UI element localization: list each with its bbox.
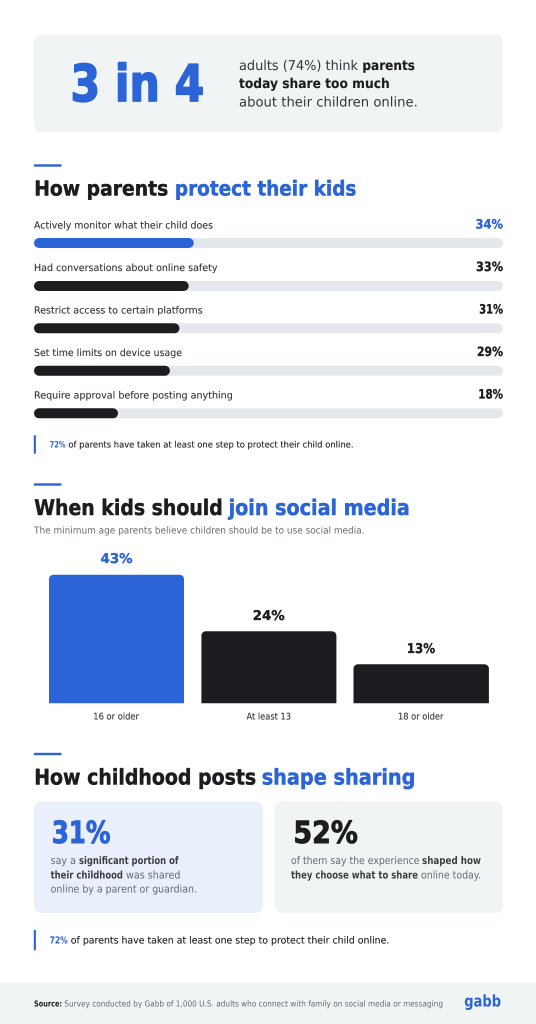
heading: shape sharing: How childhood posts xyxy=(34,765,256,790)
bar row: require approval 18%: Require approval before posting anything xyxy=(34,390,233,401)
section: how childhood posts shape sharing xyxy=(34,753,503,950)
column: 16 or older 43%: 16 or older xyxy=(93,711,139,722)
card: 31%: their childhood xyxy=(51,869,123,881)
card: 31%: 31% xyxy=(52,816,111,851)
column: 16 or older 43% xyxy=(49,552,184,722)
logo: gabb: gabb xyxy=(464,992,501,1011)
column: at least 13 24%: 24% xyxy=(253,609,285,624)
section: when kids should join social media xyxy=(33,483,489,722)
card: 52%: online today. xyxy=(421,869,481,881)
heading: protect: protect their kids xyxy=(175,177,356,201)
source text: Survey conducted by Gabb of 1,000 U.S. adults who connect with family on social media or messaging xyxy=(64,999,443,1009)
bar row: time limits 29%: 29% xyxy=(477,345,503,360)
bar row: require approval 18%: 18% xyxy=(478,387,503,402)
card: 31%: online by a parent or guardian. xyxy=(51,884,197,896)
card: 31%: say a xyxy=(51,855,76,867)
heading: shape sharing xyxy=(34,765,415,790)
bar row: actively monitor 34% xyxy=(34,218,503,248)
callout: 72% of parents repeated: 72% xyxy=(50,935,68,946)
column: at least 13 24% xyxy=(201,609,336,722)
bar row: conversations 33%: Had conversations about online safety xyxy=(34,263,218,274)
card: 52%: they choose what to share xyxy=(291,869,418,881)
card: 52% xyxy=(274,801,503,913)
heading: join social media xyxy=(34,496,410,521)
card: 52%: of them say the experience xyxy=(291,855,420,867)
section: how parents protect their kids xyxy=(34,164,503,454)
callout: 72% of parents repeated: of parents have taken at least one step to protect their child online. xyxy=(71,935,389,946)
card: 31%: was shared xyxy=(126,869,180,881)
heading: join social media: When kids should xyxy=(34,496,223,521)
source text: Source: xyxy=(34,999,62,1009)
heading: join social media: join social media xyxy=(228,496,410,521)
card: 52%: shaped how xyxy=(422,855,481,867)
bar row: actively monitor 34%: 34% xyxy=(476,218,503,233)
bar row: restrict access 31%: 31% xyxy=(479,303,503,318)
callout: 72% of parents: 72% xyxy=(50,440,66,450)
bar row: restrict access 31%: Restrict access to certain platforms xyxy=(34,306,203,317)
card: 52%: 52% xyxy=(293,816,358,851)
hero text: about their children online. xyxy=(239,95,418,111)
column: 18 or older 13% xyxy=(354,642,489,722)
callout: 72% of parents xyxy=(34,435,354,454)
bar row: conversations 33%: 33% xyxy=(476,260,503,275)
bar row: time limits 29% xyxy=(34,345,503,376)
card: 31% xyxy=(34,801,263,913)
column: 16 or older 43%: 43% xyxy=(100,552,133,567)
hero text: parents xyxy=(362,58,415,74)
bar row: restrict access 31% xyxy=(34,303,503,333)
column: at least 13 24%: At least 13 xyxy=(246,711,291,722)
callout: 72% of parents: of parents have taken at least one step to protect their child online. xyxy=(68,440,354,450)
bar row: conversations 33% xyxy=(34,260,503,291)
hero text: adults (74%) think xyxy=(239,58,358,74)
heading: protect xyxy=(34,177,356,201)
bar row: require approval 18% xyxy=(34,387,503,418)
heading: protect: How parents xyxy=(34,177,168,201)
hero number: 3 in 4: 3 in 4 xyxy=(70,54,204,113)
subtitle: The minimum age parents believe children should be to use social media. xyxy=(33,525,364,536)
footer band xyxy=(0,983,536,1024)
heading: shape sharing: shape sharing xyxy=(262,765,416,790)
callout: 72% of parents repeated xyxy=(34,930,389,950)
card: 31%: significant portion of xyxy=(79,855,179,867)
column: 18 or older 13%: 18 or older xyxy=(398,711,444,722)
bar row: actively monitor 34%: Actively monitor what their child does xyxy=(34,221,213,232)
hero text xyxy=(239,58,418,111)
bar row: time limits 29%: Set time limits on device usage xyxy=(34,348,182,359)
column: 18 or older 13%: 13% xyxy=(407,642,435,657)
hero text: today share too much xyxy=(239,76,390,92)
panel: hero statistic xyxy=(34,34,503,132)
